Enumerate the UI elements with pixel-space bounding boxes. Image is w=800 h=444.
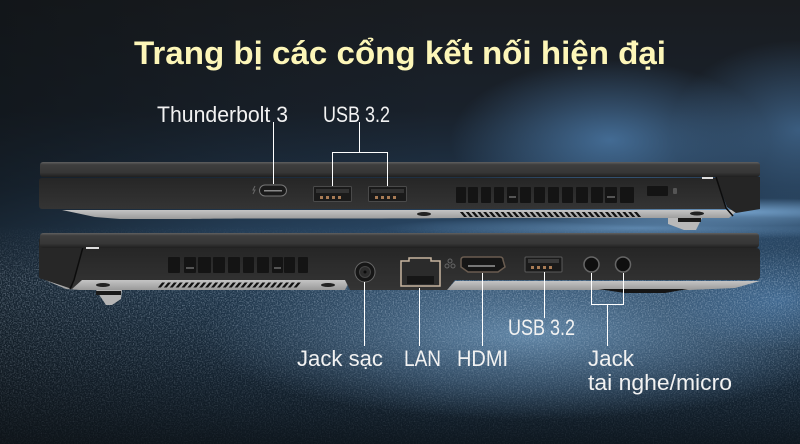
label: Jack tai nghe/micro: Jack xyxy=(588,346,635,371)
label: LAN: LAN xyxy=(404,346,441,371)
label: USB 3.2 top xyxy=(323,102,390,186)
lid xyxy=(40,233,759,248)
under foot xyxy=(598,289,688,293)
label: Thunderbolt 3: Thunderbolt 3 xyxy=(157,102,288,127)
rubber foot xyxy=(668,218,702,230)
silver underside xyxy=(62,210,738,219)
label: USB 3.2 bottom xyxy=(508,272,575,340)
vents xyxy=(168,257,308,273)
title: Trang bị các cổng kết nối hiện đại xyxy=(134,35,666,71)
label: Jack sạc: Jack sạc xyxy=(297,346,383,371)
DC jack xyxy=(355,262,375,282)
base xyxy=(68,248,760,290)
silver slats xyxy=(160,282,300,288)
audio jacks xyxy=(584,257,630,272)
USB port 1 xyxy=(314,186,352,202)
USB port xyxy=(525,257,562,272)
rubber foot xyxy=(96,290,122,305)
label: Jack tai nghe/micro xyxy=(588,273,732,395)
hinge highlight xyxy=(702,177,713,179)
laptop: right side view (top) xyxy=(39,162,760,230)
label: LAN xyxy=(404,288,441,371)
label: HDMI: HDMI xyxy=(457,346,508,371)
kensington lock xyxy=(647,186,668,196)
vents xyxy=(456,187,634,203)
label: Jack sạc xyxy=(297,282,383,371)
label: USB 3.2 top: USB 3.2 xyxy=(323,102,390,127)
lid xyxy=(40,162,760,177)
LAN port xyxy=(401,258,440,286)
network icon xyxy=(445,259,455,268)
label: USB 3.2 bottom: USB 3.2 xyxy=(508,315,575,340)
silver underside xyxy=(45,280,350,290)
thunderbolt port xyxy=(253,185,286,196)
laptop: left side view (bottom) xyxy=(39,233,760,305)
HDMI port xyxy=(461,257,505,272)
label: HDMI xyxy=(457,273,508,371)
USB port 2 xyxy=(368,186,406,202)
label: Jack tai nghe/micro: tai nghe/micro xyxy=(588,370,732,395)
label: Thunderbolt 3 xyxy=(157,102,288,184)
silver slats xyxy=(462,212,640,217)
base xyxy=(39,178,726,209)
